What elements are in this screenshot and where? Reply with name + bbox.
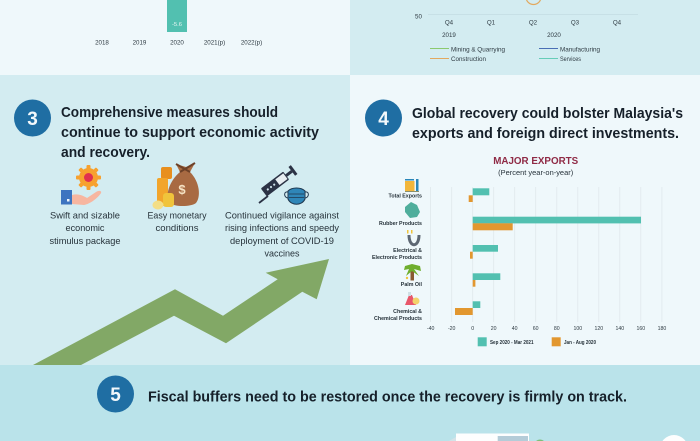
chart legend <box>478 337 596 346</box>
line chart marker <box>526 0 541 4</box>
x axis tick labels: -20 <box>448 326 456 332</box>
category labels: Electronic Products <box>372 255 422 261</box>
chart axis: 2020 <box>547 32 561 39</box>
caption: vaccines: rising infections and speedy <box>225 223 339 233</box>
icon: syringe and mask <box>259 165 308 204</box>
category labels: Chemical & <box>393 309 422 315</box>
x axis tick labels: 120 <box>594 326 603 332</box>
illustration: document <box>449 434 529 441</box>
caption: stimulus: stimulus package <box>50 236 120 246</box>
heading 3: and recovery. <box>61 144 150 161</box>
x axis tick labels: -40 <box>427 326 434 332</box>
panel: top right line chart remainder <box>350 0 700 75</box>
axis labels: years: 2018 <box>95 40 109 46</box>
heading 3: continue to support economic activity <box>61 124 320 141</box>
caption: stimulus <box>50 210 120 246</box>
category labels: Rubber Products <box>379 221 422 227</box>
icon: total exports <box>405 179 419 192</box>
caption: vaccines <box>225 210 339 258</box>
panel 4: global recovery <box>350 75 700 365</box>
x axis tick labels <box>427 326 666 332</box>
chart legend: Mining & Quarrying <box>451 46 506 54</box>
x axis tick labels: 160 <box>636 326 645 332</box>
caption: vaccines: Continued vigilance against <box>225 210 339 220</box>
x axis tick labels: 140 <box>615 326 624 332</box>
category labels: Palm Oil <box>401 282 423 288</box>
category labels: Chemical Products <box>374 316 422 322</box>
axis labels: years: 2022(p) <box>241 40 262 46</box>
category labels: Electrical & <box>393 248 422 254</box>
icon: palm tree <box>404 264 421 280</box>
arrow: recovery trend <box>33 259 329 365</box>
icon: money bag and coins: $ <box>178 182 186 197</box>
heading 4: Global recovery could bolster Malaysia's <box>412 105 683 122</box>
chart legend: Jan - Aug 2020 <box>564 340 596 346</box>
category labels: Total Exports <box>389 194 422 200</box>
heading 4 <box>412 105 683 142</box>
axis labels: years <box>95 40 262 46</box>
number badge 4 <box>365 100 402 136</box>
chart title <box>493 155 578 177</box>
chart axis: Q1 <box>487 20 496 26</box>
chart legend: Sep 2020 - Mar 2021 <box>490 340 534 346</box>
heading 3: Comprehensive measures should <box>61 104 278 121</box>
axis labels: years: 2020 <box>170 40 184 46</box>
icon: chemical flask <box>405 292 420 305</box>
caption: stimulus: Swift and sizable <box>50 210 120 220</box>
number badge 5 <box>97 376 134 412</box>
caption: vaccines: deployment of COVID-19 <box>230 236 334 246</box>
caption: stimulus: economic <box>66 223 105 233</box>
chart axis <box>415 14 638 39</box>
x axis tick labels: 180 <box>658 326 666 332</box>
axis labels: years: 2021(p) <box>204 40 225 46</box>
caption: monetary conditions: Easy monetary <box>148 210 207 220</box>
heading 4: exports and foreign direct investments. <box>412 125 679 142</box>
chart axis: Q4 <box>613 20 622 26</box>
category labels <box>372 194 423 322</box>
chart title: (Percent year-on-year) <box>498 170 573 177</box>
chart legend: Services <box>560 56 581 63</box>
bars: Sep 2020 to Mar 2021 <box>473 188 641 308</box>
bar chart: major exports <box>372 179 666 346</box>
caption: monetary conditions: conditions <box>156 223 199 233</box>
panel 3: comprehensive measures <box>0 75 350 365</box>
caption: monetary conditions <box>148 210 207 233</box>
axis labels: years: 2019 <box>133 40 147 46</box>
x axis tick labels: 60 <box>533 326 539 332</box>
number badge 3: 3 <box>27 109 38 130</box>
heading 3 <box>61 104 320 161</box>
chart title: MAJOR EXPORTS <box>493 155 578 167</box>
number badge 3 <box>14 100 51 136</box>
icon: money bag and coins <box>152 163 199 210</box>
x axis tick labels: 100 <box>573 326 582 332</box>
chart legend: Manufacturing <box>560 46 601 54</box>
heading 5: Fiscal buffers need to be restored once the recovery is firmly on track. <box>148 388 627 406</box>
icon: rubber glove <box>405 202 420 218</box>
chart legend: Construction <box>451 56 487 63</box>
x axis tick labels: 20 <box>491 326 497 332</box>
chart axis: Q3 <box>571 20 580 26</box>
bar: 2020 GDP: -5.6 <box>172 22 182 28</box>
chart axis: Q4 <box>445 20 454 26</box>
bars: Jan to Aug 2020 <box>455 195 513 315</box>
icon: magnet <box>407 230 419 245</box>
panel: top left GDP chart remainder <box>0 0 350 75</box>
x axis tick labels: 0 <box>471 326 474 332</box>
illustration: green circle <box>534 440 546 441</box>
bar: 2020 GDP <box>167 0 187 32</box>
chart axis: 2019 <box>442 32 456 39</box>
icon: hand with gear <box>61 165 101 205</box>
caption: vaccines: vaccines <box>264 248 300 258</box>
illustration: white circle <box>660 435 688 441</box>
x axis tick labels: 40 <box>512 326 518 332</box>
panel 5: fiscal buffers <box>0 365 700 441</box>
chart legend <box>430 46 601 63</box>
x axis tick labels: 80 <box>554 326 560 332</box>
chart axis: 50 <box>415 14 422 20</box>
number badge 5: 5 <box>110 385 121 406</box>
chart axis: Q2 <box>529 20 538 26</box>
number badge 4: 4 <box>378 109 389 130</box>
